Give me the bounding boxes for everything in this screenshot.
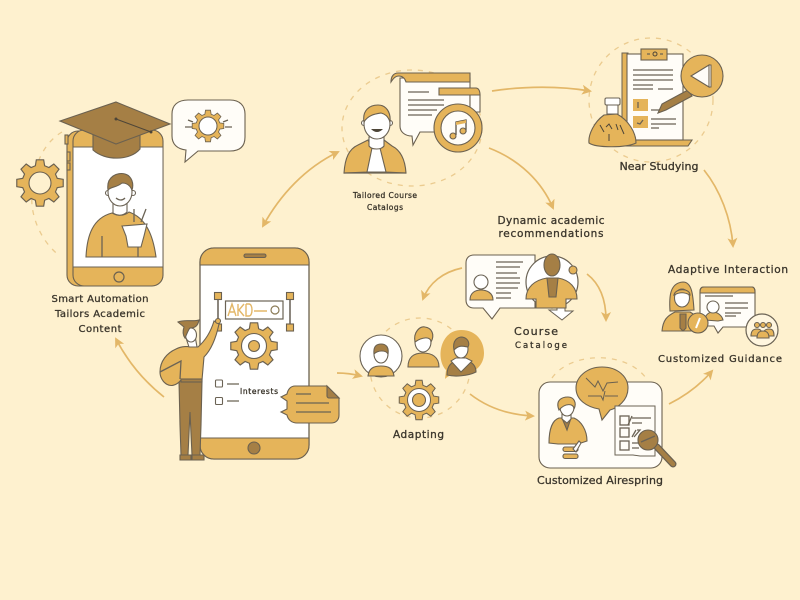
heading: dynamic academic recommendations <box>498 215 605 240</box>
icon: pencil <box>658 90 692 113</box>
label: Cataloge <box>515 341 567 351</box>
selection frame <box>214 292 294 331</box>
icon: left gear <box>17 160 63 206</box>
profile card <box>700 287 755 333</box>
title: smart automation: Content <box>78 324 122 335</box>
dashed orbit: tailored catalogs <box>342 70 482 186</box>
heading: adaptive interaction: Adaptive Interaction <box>668 264 788 276</box>
icon: group circle <box>746 314 778 346</box>
arrow: airespring to guidance <box>669 371 712 404</box>
smiling advisor <box>344 105 406 173</box>
title: smart automation <box>52 294 148 335</box>
heading: dynamic academic recommendations: recommendations <box>498 228 604 240</box>
icon: study bag <box>589 98 636 147</box>
icon: music note <box>434 104 482 152</box>
arrow: course to airespring <box>587 274 606 320</box>
label: Course <box>514 325 558 338</box>
avatars <box>360 327 484 379</box>
arrow: catalogs to recommendations <box>489 148 553 208</box>
left phone with graduate <box>60 102 170 286</box>
dashed orbit: airespring <box>552 358 646 378</box>
icon: centre gear <box>231 323 277 369</box>
speech bubble with gear <box>172 100 245 162</box>
label: Near Studying <box>620 160 698 173</box>
icon: graduation cap <box>60 102 170 158</box>
student figure <box>86 174 156 257</box>
tailored course catalogs <box>344 73 482 212</box>
form sheet <box>615 406 655 456</box>
course catalogue <box>466 254 578 351</box>
arrow: course to adapting <box>423 268 462 299</box>
arrow: two-way phone and catalogs <box>263 152 338 226</box>
title: smart automation: Tailors Academic <box>54 309 145 320</box>
dashed orbit: adapting <box>370 318 470 418</box>
label: customized airespring: Customized Airespring <box>537 474 663 487</box>
icon: gear <box>399 380 439 420</box>
adapting <box>360 327 484 441</box>
customized airespring card <box>539 367 673 468</box>
arrow: to smart automation <box>116 339 164 397</box>
big phone <box>200 248 339 459</box>
title: smart automation: Smart Automation <box>52 294 148 305</box>
label <box>514 325 567 351</box>
presenter figure <box>160 318 220 460</box>
label: Adapting <box>393 429 444 441</box>
near studying <box>589 49 723 173</box>
arrow: near studying to adaptive interaction <box>704 170 733 246</box>
label <box>352 191 417 212</box>
label: Customized Guidance <box>658 354 782 365</box>
arrow: phone to adapting <box>337 373 361 376</box>
checklist: Interests <box>240 387 278 396</box>
badge <box>688 313 708 333</box>
checklist <box>216 380 278 404</box>
label: Tailored Course <box>352 191 417 200</box>
speech bubble <box>576 367 628 420</box>
icon: megaphone circle <box>681 55 723 97</box>
note card <box>281 386 339 423</box>
heading: dynamic academic recommendations: Dynamic academic <box>498 215 605 227</box>
document scroll <box>391 73 480 145</box>
arrow: catalogs to near studying <box>492 87 590 91</box>
arrow: adapting to airespring <box>470 394 533 416</box>
dashed orbit: near studying <box>589 38 713 162</box>
dashed orbit: smart automation <box>32 132 62 256</box>
person <box>549 397 587 458</box>
woman <box>662 282 700 331</box>
icon: magnifier <box>638 430 673 464</box>
customized guidance group <box>658 282 782 365</box>
label: Catalogs <box>367 203 403 212</box>
